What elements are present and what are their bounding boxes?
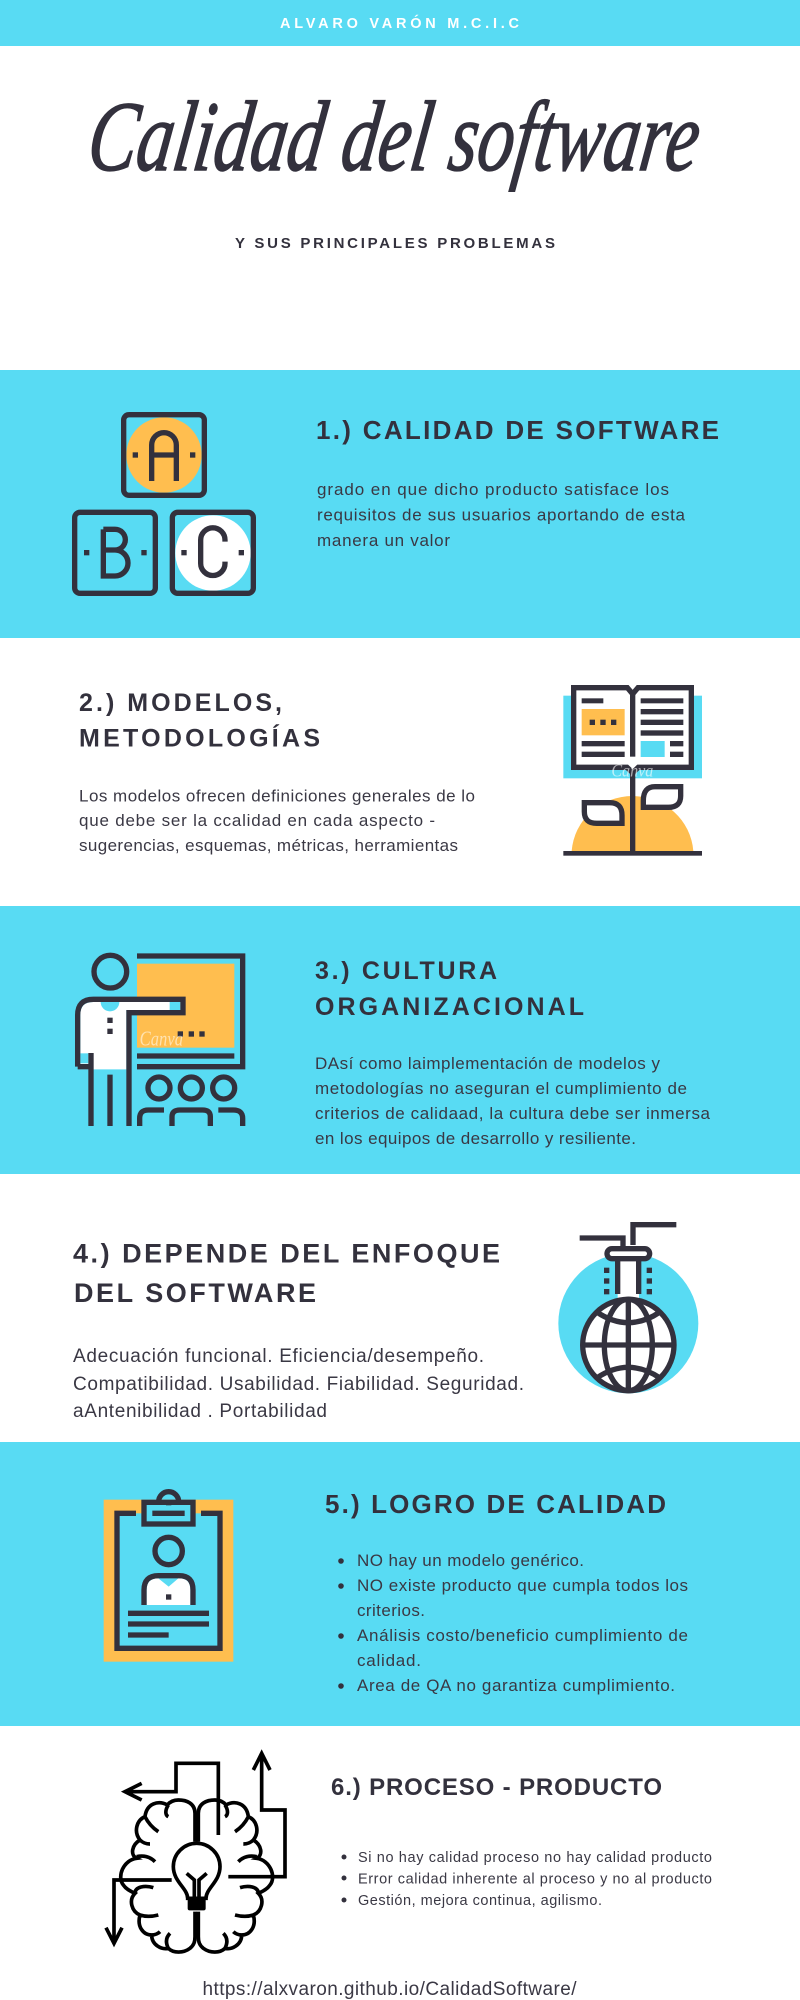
panel: 4 depende del enfoque — [73, 1225, 698, 1422]
bullet list 5: Análisis costo/beneficio cumplimiento de — [357, 1626, 688, 1645]
text block 3: DAsí como laimplementación de modelos y — [315, 1054, 660, 1073]
heading 4: DEL SOFTWARE — [74, 1278, 316, 1308]
icon: globe with pipes — [558, 1225, 698, 1393]
bullet list 5: calidad. — [357, 1651, 421, 1670]
text block 4: Compatibilidad. Usabilidad. Fiabilidad. Seguridad. — [73, 1374, 524, 1395]
icon: presenter and audience — [78, 955, 243, 1126]
icon: ABC blocks — [75, 415, 253, 593]
text block 4: aAntenibilidad . Portabilidad — [73, 1401, 327, 1422]
bulb base — [188, 1898, 206, 1910]
heading 2: METODOLOGÍAS — [79, 724, 320, 752]
arrow: left — [125, 1763, 218, 1835]
text block 3: criterios de calidaad, la cultura debe ser inmersa — [315, 1104, 711, 1123]
text block 2 — [79, 786, 475, 855]
watermark: Canva — [140, 1028, 183, 1050]
bullet list 5: NO hay un modelo genérico. — [357, 1551, 584, 1570]
bullet list 6: Si no hay calidad proceso no hay calidad producto — [358, 1850, 712, 1866]
heading 1: 1.) CALIDAD DE SOFTWARE — [316, 415, 719, 445]
icon: open book plant — [563, 688, 702, 856]
text block 2: Los modelos ofrecen definiciones generales de lo — [79, 786, 475, 806]
arrow: up — [228, 1753, 285, 1877]
text block 3: metodologías no aseguran el cumplimiento de — [315, 1079, 687, 1098]
heading 4 — [73, 1238, 500, 1308]
bullet list 6: Gestión, mejora continua, agilismo. — [358, 1893, 602, 1909]
heading 2: 2.) MODELOS, — [79, 689, 282, 717]
icon: brain with bulb and arrows — [106, 1753, 285, 1952]
author name: ALVARO VARÓN M.C.I.C — [280, 14, 520, 32]
brain right hemisphere — [198, 1800, 273, 1952]
text block 3: en los equipos de desarrollo y resiliente. — [315, 1129, 636, 1148]
bullet list 5: NO existe producto que cumpla todos los — [357, 1576, 688, 1595]
bullet list 6: Error calidad inherente al proceso y no al producto — [358, 1872, 712, 1888]
panel: 1 calidad de software — [0, 370, 800, 638]
heading 4: 4.) DEPENDE DEL ENFOQUE — [73, 1238, 500, 1268]
text block 4 — [73, 1346, 524, 1422]
text block 2: sugerencias, esquemas, métricas, herramientas — [79, 836, 458, 855]
footer url: https://alxvaron.github.io/CalidadSoftware/ — [202, 1979, 577, 2000]
text block 1 — [317, 480, 686, 550]
heading 2 — [79, 689, 320, 752]
heading 3: ORGANIZACIONAL — [315, 993, 584, 1021]
subtitle: Y SUS PRINCIPALES PROBLEMAS — [235, 235, 555, 252]
icon: clipboard profile — [104, 1492, 233, 1662]
watermark: Canva — [611, 761, 653, 781]
light bulb — [173, 1843, 220, 1898]
heading 3 — [315, 957, 584, 1021]
brain left hemisphere — [121, 1800, 195, 1952]
text block 1: requisitos de sus usuarios aportando de esta — [317, 506, 686, 524]
text block 2: que debe ser la ccalidad en cada aspecto - — [79, 811, 435, 830]
bullet list 6 — [342, 1850, 712, 1909]
text block 3 — [315, 1054, 711, 1148]
arrow: down — [106, 1880, 172, 1943]
heading 5: 5.) LOGRO DE CALIDAD — [325, 1489, 666, 1519]
panel: 3 cultura organizacional — [0, 906, 800, 1174]
panel: 6 proceso producto — [106, 1753, 712, 1952]
heading 6: 6.) PROCESO - PRODUCTO — [331, 1774, 662, 1801]
heading 3: 3.) CULTURA — [315, 957, 497, 985]
text block 1: manera un valor — [317, 531, 450, 550]
header band — [0, 0, 800, 46]
bullet list 5: Area de QA no garantiza cumplimiento. — [357, 1676, 675, 1695]
text block 1: grado en que dicho producto satisface los — [317, 480, 669, 499]
text block 4: Adecuación funcional. Eficiencia/desempeño. — [73, 1346, 484, 1367]
panel: 2 modelos, metodologias — [79, 688, 702, 856]
bullet list 5 — [338, 1551, 688, 1695]
panel: 5 logro de calidad — [0, 1442, 800, 1726]
bullet list 5: criterios. — [357, 1601, 425, 1620]
